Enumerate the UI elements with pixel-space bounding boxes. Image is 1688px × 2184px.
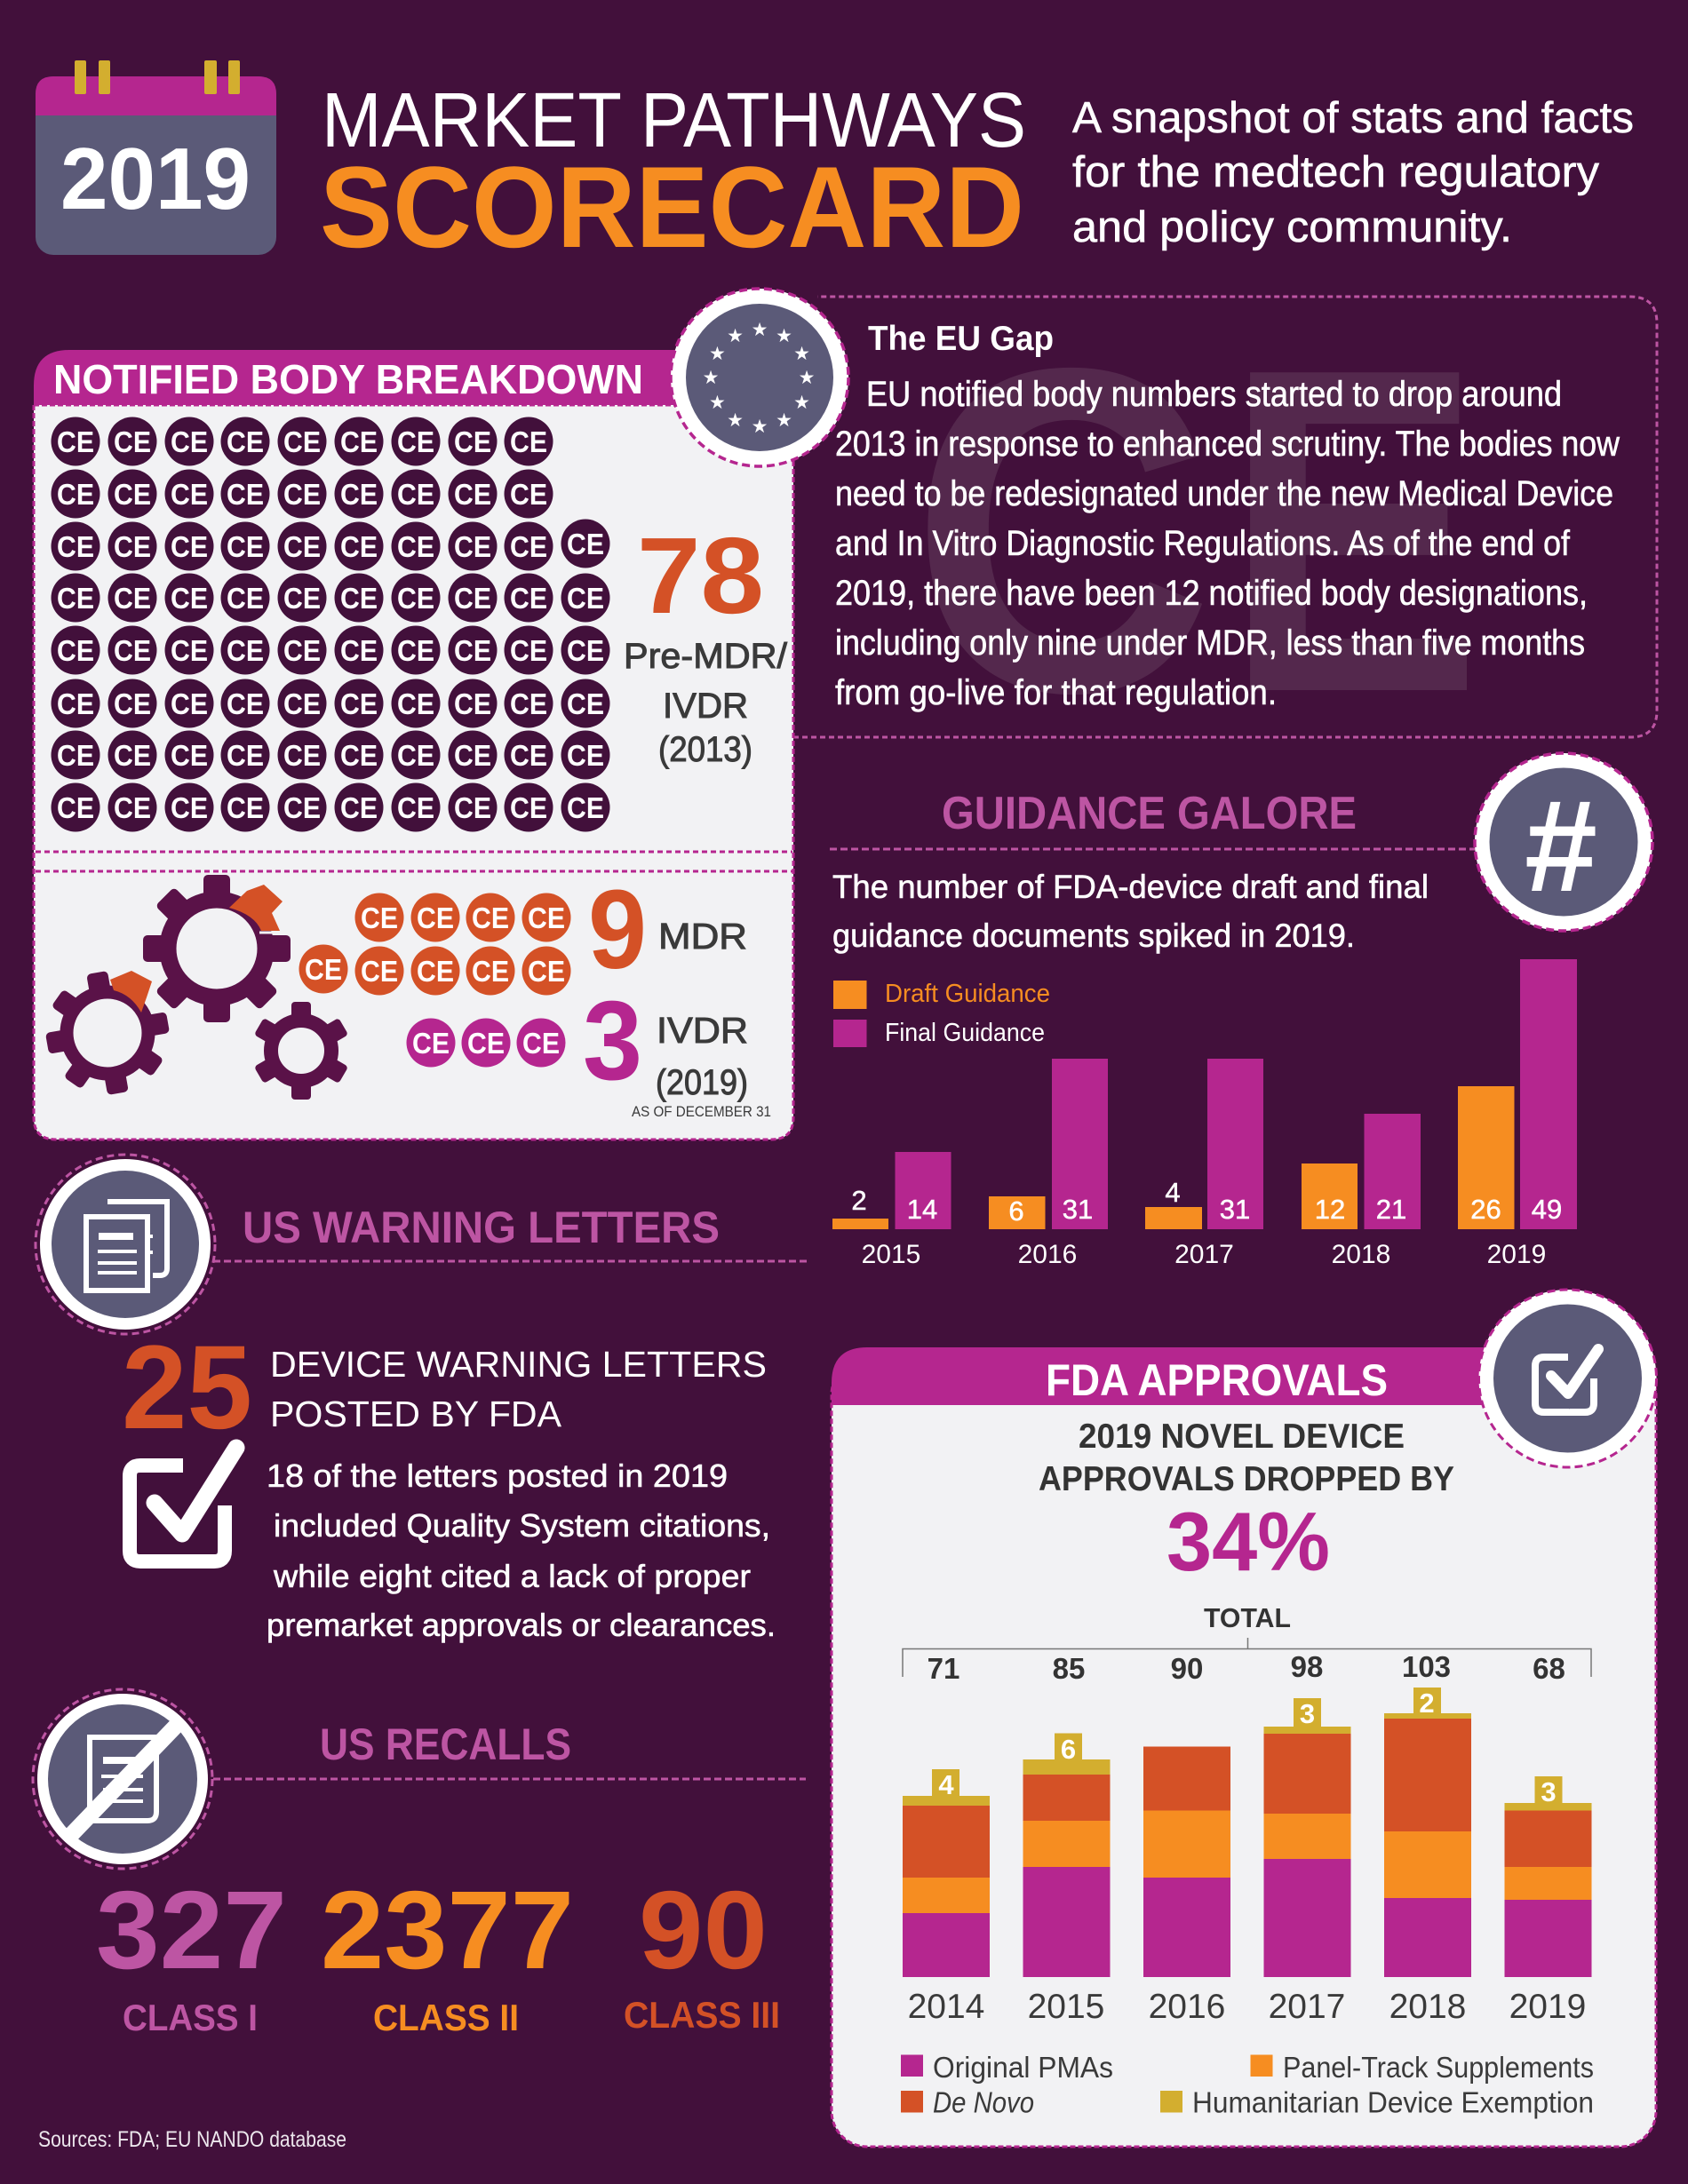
CE badges: 3 IVDR <box>407 1018 565 1068</box>
stacked bar chart: FDA approvals 2014-2019: 98 <box>1291 1650 1323 1683</box>
CE badges: 78 pre-MDR/IVDR notified bodies: CE <box>57 530 94 563</box>
bar chart: guidance documents 2015-2019 <box>832 959 1577 1269</box>
bar chart: guidance documents 2015-2019: 21 <box>1376 1194 1406 1225</box>
stat: 327 class I: 327 <box>96 1869 287 1992</box>
stacked bar chart: FDA approvals 2014-2019: 85 <box>1053 1652 1085 1685</box>
medium gear <box>45 971 170 1095</box>
callout: novel device approvals dropped 34%: APPROVALS DROPPED BY <box>1039 1460 1454 1498</box>
callout: novel device approvals dropped 34%: 2019 NOVEL DEVICE <box>1079 1418 1405 1456</box>
text block: EU gap body: 2019, there have been 12 notified body designations, <box>835 574 1588 613</box>
section: guidance galore <box>830 753 1652 1269</box>
CE badges: 78 pre-MDR/IVDR notified bodies: CE <box>227 425 264 458</box>
text block: EU gap body: EU notified body numbers started to drop around <box>866 375 1562 414</box>
bar chart: guidance documents 2015-2019: 2018 <box>1332 1240 1390 1269</box>
large gear <box>143 875 291 1022</box>
stacked bar chart: FDA approvals 2014-2019: 68 <box>1533 1652 1565 1685</box>
stacked bar chart: FDA approvals 2014-2019: 6 <box>1061 1734 1076 1765</box>
heading: US recalls: US RECALLS <box>320 1719 571 1769</box>
stat: 9 MDR: MDR <box>658 916 747 957</box>
bars: 2014 <box>903 1769 990 1977</box>
CE badges: 9 MDR: CE <box>305 953 342 986</box>
CE badges: 78 pre-MDR/IVDR notified bodies: CE <box>510 739 547 772</box>
CE badges: 78 pre-MDR/IVDR notified bodies: CE <box>340 582 378 615</box>
CE badges: 78 pre-MDR/IVDR notified bodies: CE <box>114 582 151 615</box>
CE badges: 78 pre-MDR/IVDR notified bodies: CE <box>283 478 321 511</box>
CE badges: 78 pre-MDR/IVDR notified bodies: CE <box>567 582 604 615</box>
CE badges: 78 pre-MDR/IVDR notified bodies: CE <box>283 530 321 563</box>
CE badges: 78 pre-MDR/IVDR notified bodies: CE <box>397 739 434 772</box>
CE badges: 78 pre-MDR/IVDR notified bodies: CE <box>397 582 434 615</box>
stacked bar chart: FDA approvals 2014-2019: 2016 <box>1149 1988 1225 2026</box>
bars: 2017 <box>1263 1698 1350 1977</box>
CE badges: 78 pre-MDR/IVDR notified bodies: CE <box>454 478 491 511</box>
icon: EU stars circle: ★ <box>793 343 810 364</box>
CE badges: 78 pre-MDR/IVDR notified bodies: CE <box>57 634 94 667</box>
CE badges: 78 pre-MDR/IVDR notified bodies: CE <box>114 530 151 563</box>
bar chart: guidance documents 2015-2019: 2016 <box>1018 1240 1077 1269</box>
text block: EU gap body: and In Vitro Diagnostic Regulations. As of the end of <box>835 524 1571 563</box>
CE badges: 78 pre-MDR/IVDR notified bodies: CE <box>454 582 491 615</box>
panel: notified body breakdown <box>34 350 793 1140</box>
stacked bar chart: FDA approvals 2014-2019: 71 <box>928 1652 959 1685</box>
CE badges: 9 MDR: CE <box>472 901 509 934</box>
text block: warning letters detail: included Quality System citations, <box>274 1507 770 1544</box>
legend: guidance: Draft Guidance <box>885 980 1050 1008</box>
text block: warning letters detail: premarket approvals or clearances. <box>267 1607 776 1643</box>
section: US recalls <box>33 1689 806 2038</box>
bar chart: guidance documents 2015-2019: 31 <box>1063 1194 1093 1225</box>
stacked bar chart: FDA approvals 2014-2019: 103 <box>1402 1650 1451 1683</box>
stacked bar chart: FDA approvals 2014-2019: 90 <box>1171 1652 1203 1685</box>
CE badges: 78 pre-MDR/IVDR notified bodies: CE <box>454 791 491 824</box>
CE badges: 9 MDR: CE <box>417 955 454 988</box>
CE badges: 78 pre-MDR/IVDR notified bodies: CE <box>171 634 208 667</box>
CE badges: 78 pre-MDR/IVDR notified bodies: CE <box>510 530 547 563</box>
panel: the EU gap <box>793 273 1657 789</box>
CE badges: 78 pre-MDR/IVDR notified bodies: CE <box>114 687 151 720</box>
icon: EU stars circle: ★ <box>776 409 792 431</box>
heading: guidance galore: GUIDANCE GALORE <box>942 788 1357 839</box>
icon: calendar 2019 <box>36 60 276 255</box>
stat: 78 pre-MDR/IVDR 2013: Pre-MDR/ <box>624 637 788 676</box>
CE badges: 3 IVDR: CE <box>467 1027 505 1060</box>
bars: 2015 <box>1023 1734 1111 1977</box>
CE badges: 78 pre-MDR/IVDR notified bodies: CE <box>567 739 604 772</box>
icon: crossed-out document circle <box>33 1689 212 1869</box>
CE badges: 78 pre-MDR/IVDR notified bodies: CE <box>454 634 491 667</box>
CE badges: 78 pre-MDR/IVDR notified bodies: CE <box>454 425 491 458</box>
CE badges: 78 pre-MDR/IVDR notified bodies: CE <box>397 687 434 720</box>
CE badges: 78 pre-MDR/IVDR notified bodies: CE <box>397 478 434 511</box>
title: MARKET PATHWAYS <box>322 77 1026 163</box>
legend: FDA approvals: Original PMAs <box>933 2051 1113 2084</box>
bar chart: guidance documents 2015-2019: 6 <box>1008 1195 1024 1227</box>
CE badges: 78 pre-MDR/IVDR notified bodies: CE <box>57 739 94 772</box>
bar chart: guidance documents 2015-2019: 2017 <box>1174 1240 1234 1269</box>
legend: guidance <box>833 980 1050 1047</box>
CE badges: 78 pre-MDR/IVDR notified bodies: CE <box>510 582 547 615</box>
CE badges: 3 IVDR: CE <box>522 1027 560 1060</box>
panel: FDA approvals <box>832 1290 1656 2147</box>
stacked bar chart: FDA approvals 2014-2019: 2 <box>1419 1688 1435 1719</box>
icon: EU stars circle: ★ <box>727 409 744 431</box>
CE badges: 9 MDR <box>299 893 570 995</box>
stacked bar chart: FDA approvals 2014-2019: 2017 <box>1269 1988 1345 2026</box>
stacked bar chart: FDA approvals 2014-2019: TOTAL <box>1204 1602 1291 1633</box>
text block: guidance intro <box>832 869 1429 954</box>
CE badges: 78 pre-MDR/IVDR notified bodies: CE <box>283 791 321 824</box>
stacked bar chart: FDA approvals 2014-2019: 2018 <box>1389 1988 1466 2026</box>
CE badges: 9 MDR: CE <box>472 955 509 988</box>
bar chart: guidance documents 2015-2019: 2 <box>851 1185 867 1216</box>
stat: 78 pre-MDR/IVDR 2013: (2013) <box>658 730 752 769</box>
CE badges: 78 pre-MDR/IVDR notified bodies: CE <box>340 634 378 667</box>
CE badges: 78 pre-MDR/IVDR notified bodies: CE <box>340 687 378 720</box>
tagline: and policy community. <box>1072 203 1512 251</box>
CE badges: 78 pre-MDR/IVDR notified bodies: CE <box>57 478 94 511</box>
stat: 90 class III: CLASS III <box>624 1994 780 2036</box>
watermark: CE: C <box>911 273 1214 789</box>
text block: EU gap body: including only nine under MDR, less than five months <box>835 623 1585 663</box>
bar chart: guidance documents 2015-2019: 14 <box>907 1194 937 1225</box>
icon: EU stars circle: ★ <box>752 416 768 437</box>
CE badges: 78 pre-MDR/IVDR notified bodies: CE <box>114 791 151 824</box>
icon: EU stars circle: ★ <box>709 392 726 413</box>
icon: EU stars circle: ★ <box>727 325 744 346</box>
stat: 2377 class II: 2377 <box>321 1869 574 1992</box>
CE badges: 78 pre-MDR/IVDR notified bodies: CE <box>397 530 434 563</box>
icon: hash circle: # <box>1525 774 1597 919</box>
CE badges: 78 pre-MDR/IVDR notified bodies: CE <box>171 582 208 615</box>
heading: notified body breakdown: NOTIFIED BODY BREAKDOWN <box>53 356 643 402</box>
CE badges: 78 pre-MDR/IVDR notified bodies: CE <box>171 530 208 563</box>
icon: calendar 2019: 2019 <box>60 130 251 227</box>
icon: gears <box>45 875 348 1100</box>
CE badges: 78 pre-MDR/IVDR notified bodies: CE <box>397 791 434 824</box>
icon: checkbox <box>130 1448 236 1561</box>
section: US warning letters <box>36 1155 807 1643</box>
text block: guidance intro: guidance documents spiked in 2019. <box>832 917 1355 954</box>
CE badges: 78 pre-MDR/IVDR notified bodies: CE <box>227 582 264 615</box>
CE badges: 78 pre-MDR/IVDR notified bodies: CE <box>454 687 491 720</box>
CE badges: 78 pre-MDR/IVDR notified bodies: CE <box>171 478 208 511</box>
CE badges: 78 pre-MDR/IVDR notified bodies: CE <box>171 739 208 772</box>
CE badges: 78 pre-MDR/IVDR notified bodies: CE <box>57 791 94 824</box>
text block: guidance intro: The number of FDA-device draft and final <box>832 869 1429 905</box>
CE badges: 78 pre-MDR/IVDR notified bodies: CE <box>340 425 378 458</box>
CE badges: 78 pre-MDR/IVDR notified bodies: CE <box>227 634 264 667</box>
icon: EU stars circle: ★ <box>776 325 792 346</box>
heading: The EU Gap: The EU Gap <box>868 320 1054 358</box>
bar chart: guidance documents 2015-2019: 2019 <box>1487 1240 1546 1269</box>
CE badges: 78 pre-MDR/IVDR notified bodies: CE <box>283 739 321 772</box>
watermark: CE: E <box>1224 273 1482 789</box>
icon: checkbox circle <box>1478 1290 1656 1467</box>
legend: FDA approvals: Humanitarian Device Exemption <box>1192 2085 1594 2119</box>
bar chart: guidance documents 2015-2019: 31 <box>1220 1194 1250 1225</box>
CE badges: 78 pre-MDR/IVDR notified bodies: CE <box>171 425 208 458</box>
CE badges: 3 IVDR: CE <box>412 1027 450 1060</box>
stacked bar chart: FDA approvals 2014-2019: 2014 <box>908 1988 984 2026</box>
CE badges: 78 pre-MDR/IVDR notified bodies: CE <box>340 530 378 563</box>
bars: 2019 <box>1505 1776 1592 1977</box>
CE badges: 78 pre-MDR/IVDR notified bodies: CE <box>227 791 264 824</box>
icon: EU stars circle <box>671 289 848 466</box>
title <box>320 77 1026 272</box>
stacked bar chart: FDA approvals 2014-2019 <box>903 1602 1592 2026</box>
stat: 25 device warning letters <box>122 1322 767 1454</box>
stat: 90 class III <box>624 1869 780 2036</box>
stat: 78 pre-MDR/IVDR 2013: 78 <box>637 515 764 636</box>
title: SCORECARD <box>320 142 1024 272</box>
stat: 3 IVDR 2019: IVDR <box>657 1010 748 1051</box>
CE badges: 78 pre-MDR/IVDR notified bodies <box>52 417 609 831</box>
CE badges: 78 pre-MDR/IVDR notified bodies: CE <box>510 425 547 458</box>
stat: 3 IVDR 2019: 3 <box>583 978 642 1103</box>
CE badges: 9 MDR: CE <box>417 901 454 934</box>
CE badges: 78 pre-MDR/IVDR notified bodies: CE <box>114 425 151 458</box>
bars: 2016 <box>1143 1746 1230 1977</box>
CE badges: 78 pre-MDR/IVDR notified bodies: CE <box>567 687 604 720</box>
CE badges: 78 pre-MDR/IVDR notified bodies: CE <box>283 425 321 458</box>
CE badges: 9 MDR: CE <box>528 955 565 988</box>
tagline: A snapshot of stats and facts <box>1072 94 1634 142</box>
legend: FDA approvals: De Novo <box>933 2085 1034 2119</box>
stacked bar chart: FDA approvals 2014-2019: 2015 <box>1028 1988 1104 2026</box>
CE badges: 78 pre-MDR/IVDR notified bodies: CE <box>510 791 547 824</box>
bar chart: guidance documents 2015-2019: 26 <box>1470 1194 1501 1225</box>
note: as of December 31: AS OF DECEMBER 31 <box>632 1103 771 1120</box>
legend: FDA approvals: Panel-Track Supplements <box>1283 2051 1594 2084</box>
CE badges: 9 MDR: CE <box>361 955 398 988</box>
CE badges: 78 pre-MDR/IVDR notified bodies: CE <box>227 478 264 511</box>
stat: 3 IVDR 2019 <box>583 978 748 1103</box>
bar chart: guidance documents 2015-2019: 4 <box>1165 1177 1181 1208</box>
icon: EU stars circle: ★ <box>799 367 815 388</box>
sources: Sources: FDA; EU NANDO database <box>38 2127 346 2152</box>
heading: FDA approvals: FDA APPROVALS <box>1046 1355 1388 1405</box>
CE badges: 78 pre-MDR/IVDR notified bodies: CE <box>283 634 321 667</box>
stat: 25 device warning letters: 25 <box>122 1322 252 1454</box>
CE badges: 9 MDR: CE <box>528 901 565 934</box>
CE badges: 78 pre-MDR/IVDR notified bodies: CE <box>567 528 604 560</box>
callout: novel device approvals dropped 34%: 34% <box>1166 1495 1330 1588</box>
icon: EU stars circle: ★ <box>703 367 719 388</box>
stat: 90 class III: 90 <box>639 1869 768 1992</box>
CE badges: 78 pre-MDR/IVDR notified bodies: CE <box>397 425 434 458</box>
stat: 9 MDR: 9 <box>588 867 647 992</box>
heading: US warning letters: US WARNING LETTERS <box>243 1203 720 1252</box>
icon: EU stars circle: ★ <box>752 319 768 340</box>
CE badges: 78 pre-MDR/IVDR notified bodies: CE <box>340 739 378 772</box>
legend: guidance: Final Guidance <box>885 1019 1045 1047</box>
CE badges: 78 pre-MDR/IVDR notified bodies: CE <box>510 634 547 667</box>
CE badges: 78 pre-MDR/IVDR notified bodies: CE <box>340 478 378 511</box>
CE badges: 78 pre-MDR/IVDR notified bodies: CE <box>171 687 208 720</box>
CE badges: 78 pre-MDR/IVDR notified bodies: CE <box>397 634 434 667</box>
CE badges: 78 pre-MDR/IVDR notified bodies: CE <box>454 739 491 772</box>
stat: 25 device warning letters: POSTED BY FDA <box>270 1394 562 1434</box>
icon: hash circle <box>1475 753 1652 931</box>
icon: EU stars circle: ★ <box>793 392 810 413</box>
text block: warning letters detail: 18 of the letters posted in 2019 <box>267 1457 728 1494</box>
stat: 3 IVDR 2019: (2019) <box>656 1063 748 1102</box>
stat: 25 device warning letters: DEVICE WARNING LETTERS <box>270 1344 767 1385</box>
CE badges: 78 pre-MDR/IVDR notified bodies: CE <box>114 478 151 511</box>
stacked bar chart: FDA approvals 2014-2019: 4 <box>938 1769 954 1800</box>
small gear <box>254 1002 348 1100</box>
text block: warning letters detail <box>267 1457 776 1643</box>
stacked bar chart: FDA approvals 2014-2019: 2019 <box>1509 1988 1586 2026</box>
CE badges: 78 pre-MDR/IVDR notified bodies: CE <box>57 425 94 458</box>
stat: 78 pre-MDR/IVDR 2013: IVDR <box>663 687 748 726</box>
callout: novel device approvals dropped 34% <box>1039 1418 1454 1588</box>
text block: EU gap body: need to be redesignated under the new Medical Device <box>835 474 1613 513</box>
bar chart: guidance documents 2015-2019: 12 <box>1315 1194 1345 1225</box>
CE badges: 78 pre-MDR/IVDR notified bodies: CE <box>283 687 321 720</box>
stat: 78 pre-MDR/IVDR 2013 <box>624 515 788 769</box>
text block: EU gap body: 2013 in response to enhanced scrutiny. The bodies now <box>835 425 1620 464</box>
bars: 2018 <box>1384 1688 1471 1977</box>
text block: EU gap body <box>835 375 1620 712</box>
stacked bar chart: FDA approvals 2014-2019: 3 <box>1300 1698 1315 1729</box>
CE badges: 9 MDR: CE <box>361 901 398 934</box>
CE badges: 78 pre-MDR/IVDR notified bodies: CE <box>567 791 604 824</box>
CE badges: 78 pre-MDR/IVDR notified bodies: CE <box>114 739 151 772</box>
watermark: CE <box>911 273 1482 789</box>
CE badges: 78 pre-MDR/IVDR notified bodies: CE <box>227 687 264 720</box>
icon: documents circle <box>36 1155 215 1334</box>
stat: 9 MDR <box>588 867 747 992</box>
CE badges: 78 pre-MDR/IVDR notified bodies: CE <box>510 478 547 511</box>
tagline: for the medtech regulatory <box>1072 148 1600 196</box>
CE badges: 78 pre-MDR/IVDR notified bodies: CE <box>57 687 94 720</box>
CE badges: 78 pre-MDR/IVDR notified bodies: CE <box>567 634 604 667</box>
stacked bar chart: FDA approvals 2014-2019: 3 <box>1541 1776 1557 1807</box>
icon: EU stars circle: ★ <box>709 343 726 364</box>
text block: EU gap body: from go-live for that regulation. <box>835 673 1277 712</box>
CE badges: 78 pre-MDR/IVDR notified bodies: CE <box>227 530 264 563</box>
text block: warning letters detail: while eight cited a lack of proper <box>273 1558 751 1594</box>
CE badges: 78 pre-MDR/IVDR notified bodies: CE <box>283 582 321 615</box>
legend: FDA approvals <box>901 2051 1594 2119</box>
bar chart: guidance documents 2015-2019: 49 <box>1532 1194 1562 1225</box>
CE badges: 78 pre-MDR/IVDR notified bodies: CE <box>340 791 378 824</box>
stat: 327 class I: CLASS I <box>123 1997 258 2038</box>
CE badges: 78 pre-MDR/IVDR notified bodies: CE <box>227 739 264 772</box>
CE badges: 78 pre-MDR/IVDR notified bodies: CE <box>171 791 208 824</box>
CE badges: 78 pre-MDR/IVDR notified bodies: CE <box>114 634 151 667</box>
CE badges: 78 pre-MDR/IVDR notified bodies: CE <box>454 530 491 563</box>
CE badges: 78 pre-MDR/IVDR notified bodies: CE <box>510 687 547 720</box>
bar chart: guidance documents 2015-2019: 2015 <box>862 1240 920 1269</box>
tagline <box>1072 94 1634 251</box>
stat: 2377 class II: CLASS II <box>373 1997 519 2038</box>
CE badges: 78 pre-MDR/IVDR notified bodies: CE <box>57 582 94 615</box>
